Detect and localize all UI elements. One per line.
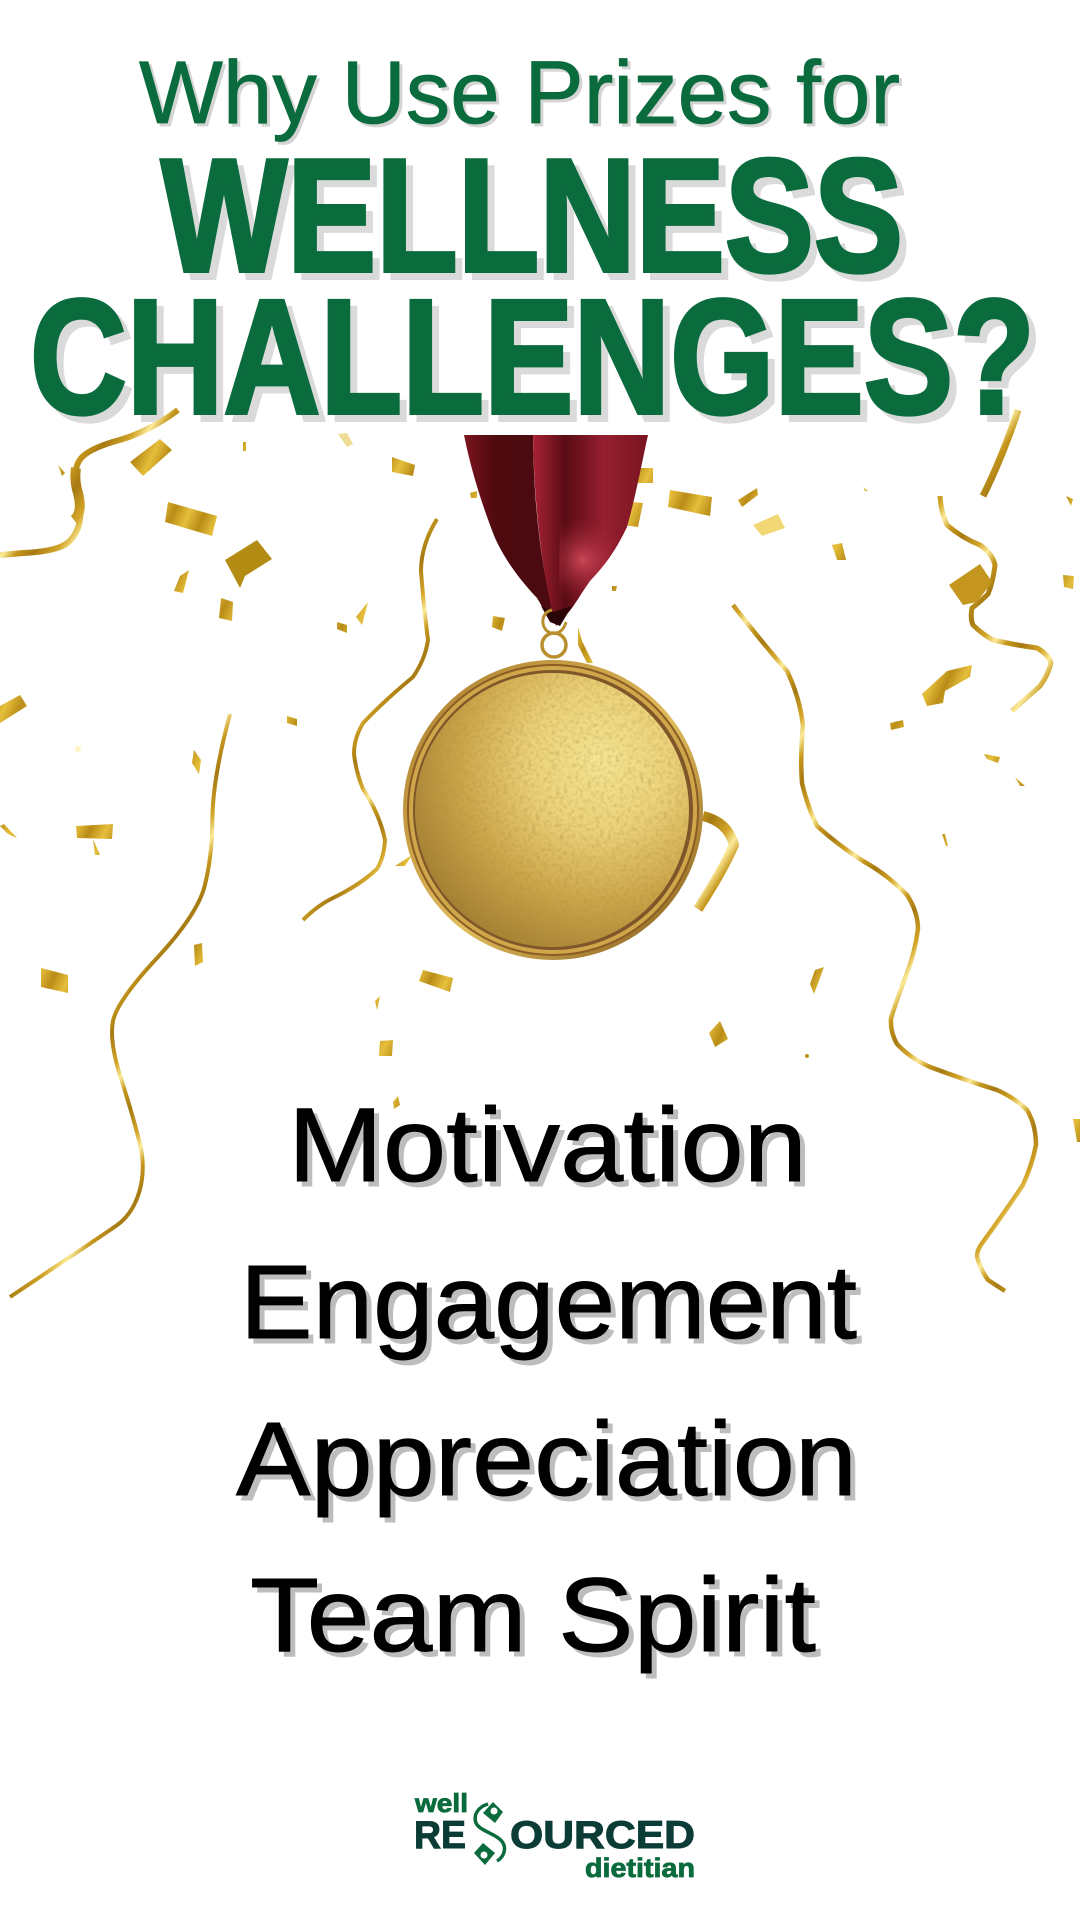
- streamer: centre left: [303, 519, 437, 920]
- logo word: OURCED: OURCED: [510, 1814, 695, 1857]
- logo icon: dollar-bill S: [474, 1802, 505, 1865]
- medal rings: [542, 610, 566, 657]
- streamer: left long: [10, 714, 230, 1297]
- title: [30, 42, 1035, 448]
- logo word: well: well: [414, 1788, 468, 1818]
- medal disc: [403, 660, 703, 960]
- reason: Engagement: Engagement: [240, 1244, 857, 1361]
- list of reasons: [236, 1087, 857, 1674]
- streamer: right long: [733, 605, 1036, 1291]
- streamer: top right strip: [983, 410, 1018, 496]
- logo word: RE: RE: [414, 1814, 466, 1857]
- logo: Well Resourced Dietitian: [414, 1788, 695, 1883]
- medal ribbon: [464, 435, 648, 626]
- title line: Why Use Prizes for: Why Use Prizes for: [139, 42, 900, 142]
- streamer: curl beside medal: [698, 816, 734, 909]
- reason: Team Spirit: Team Spirit: [250, 1557, 816, 1674]
- reason: Motivation: Motivation: [288, 1087, 807, 1204]
- streamer: top left: [0, 410, 178, 555]
- reason: Appreciation: Appreciation: [236, 1401, 857, 1518]
- gold confetti and streamers: [0, 410, 1080, 1297]
- streamer: top right curl: [940, 496, 1051, 711]
- medal: [403, 435, 703, 960]
- logo word: dietitian: dietitian: [585, 1853, 695, 1883]
- confetti pieces: [0, 433, 1080, 1142]
- title line: WELLNESS: WELLNESS: [161, 126, 903, 306]
